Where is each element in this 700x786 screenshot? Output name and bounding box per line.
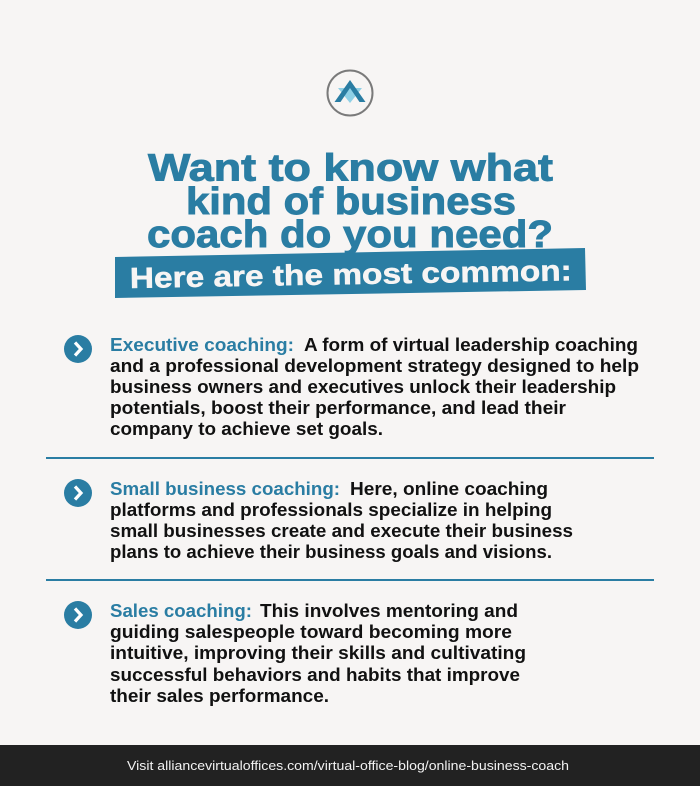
banner: [115, 248, 586, 298]
banner: Here are the most common:: [130, 255, 572, 295]
text: small business coaching: small businesses create and execute their business: [110, 521, 573, 541]
text: small business coaching: platforms and professionals specialize in helping: [110, 500, 552, 520]
icon: chevron bullet: [64, 601, 92, 629]
text: executive coaching: A form of virtual leadership coaching: [304, 335, 638, 355]
text: small business coaching: plans to achieve their business goals and visions.: [110, 542, 552, 562]
panel: small business coaching: [64, 479, 573, 562]
text: executive coaching: Executive coaching:: [110, 335, 294, 355]
icon: logo: [328, 70, 372, 116]
title: coach do you need?: [147, 214, 553, 256]
text: small business coaching: [110, 479, 573, 562]
footer bar: Visit alliancevirtualoffices.com/virtual-office-blog/online-business-coach: [127, 759, 569, 773]
title: kind of business: [186, 181, 516, 223]
text: small business coaching: Small business coaching:: [110, 479, 340, 499]
panel: sales coaching: [64, 601, 526, 706]
text: sales coaching: their sales performance.: [110, 686, 329, 706]
title: Want to know what: [148, 148, 553, 190]
text: sales coaching: [110, 601, 526, 706]
text: sales coaching: guiding salespeople toward becoming more: [110, 622, 512, 642]
text: executive coaching: potentials, boost their performance, and lead their: [110, 398, 566, 418]
text: sales coaching: intuitive, improving their skills and cultivating: [110, 643, 526, 663]
text: executive coaching: business owners and executives unlock their leadership: [110, 377, 616, 397]
text: sales coaching: successful behaviors and habits that improve: [110, 665, 520, 685]
text: executive coaching: company to achieve set goals.: [110, 419, 383, 439]
panel: executive coaching: [64, 335, 639, 439]
text: sales coaching: This involves mentoring and: [260, 601, 518, 621]
text: executive coaching: and a professional development strategy designed to help: [110, 356, 639, 376]
icon: chevron bullet: [64, 335, 92, 363]
footer bar: [0, 745, 700, 786]
text: small business coaching: Here, online coaching: [350, 479, 548, 499]
title: [147, 148, 553, 256]
text: sales coaching: Sales coaching:: [110, 601, 252, 621]
icon: chevron bullet: [64, 479, 92, 507]
text: executive coaching: [110, 335, 639, 439]
